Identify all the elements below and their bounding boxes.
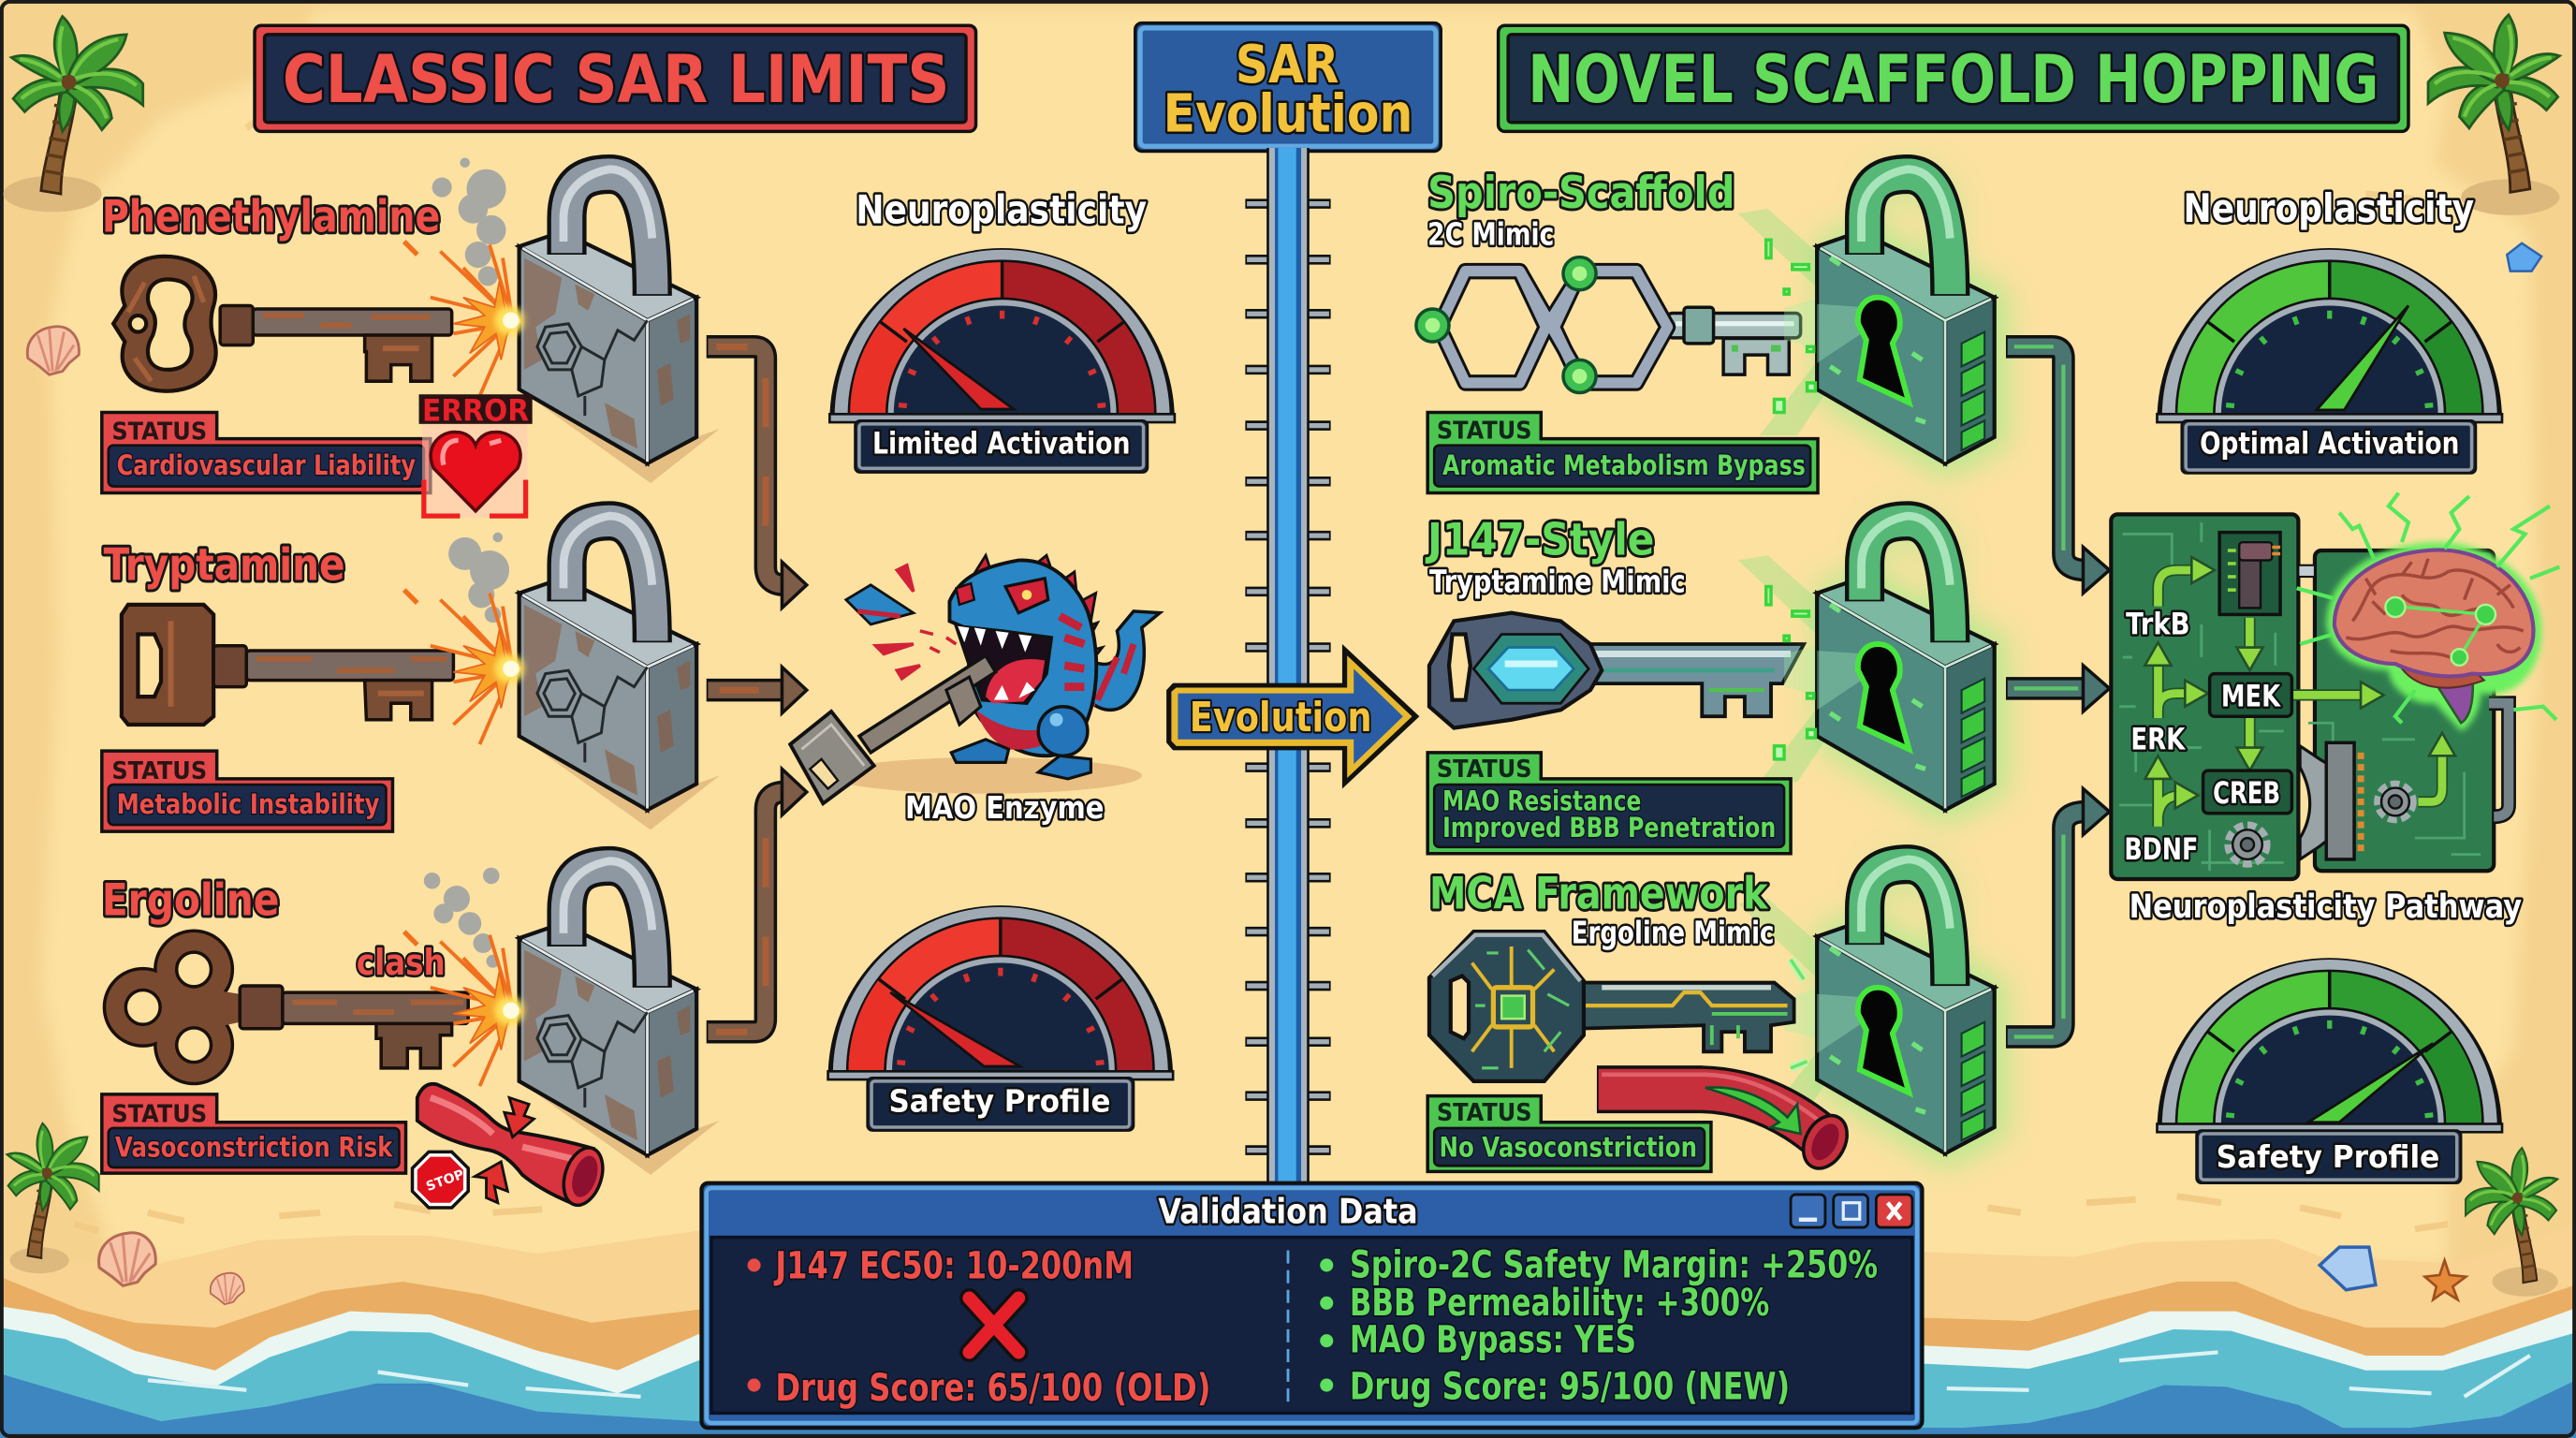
icon: grey lock, phenethylamine bbox=[520, 169, 720, 483]
panel: left circuit board bbox=[2111, 514, 2298, 879]
label: MAO enzyme: MAO Enzyme bbox=[905, 789, 1104, 826]
icon: smoke clouds bbox=[424, 157, 509, 968]
header: novel scaffold hopping: NOVEL SCAFFOLD HOPPING bbox=[1528, 41, 2378, 118]
icon: lightning bolts bbox=[2297, 493, 2559, 723]
label: Phenethylamine: Phenethylamine bbox=[102, 191, 440, 242]
arrow: ergoline to MAO bbox=[707, 769, 807, 1032]
icon: stop sign bbox=[413, 1152, 468, 1208]
icon: J147 style key bbox=[1429, 613, 1804, 728]
icon: grey lock, tryptamine bbox=[520, 516, 720, 829]
pathway node: MEK bbox=[2210, 674, 2291, 716]
label: MCA framework ergoline mimic: Ergoline Mimic bbox=[1572, 914, 1775, 950]
arrow: tryptamine to MAO bbox=[707, 668, 807, 713]
icon: glowing brain bbox=[2326, 542, 2541, 731]
panel: right circuit board bbox=[2315, 550, 2494, 871]
status: no vasoconstriction bbox=[1427, 1096, 1711, 1171]
gauge: limited activation bbox=[829, 248, 1175, 473]
label: Spiro-Scaffold 2C mimic bbox=[1427, 168, 1734, 253]
pathway node: MEK: MEK bbox=[2221, 681, 2281, 714]
pathway node: BDNF: BDNF bbox=[2124, 833, 2198, 867]
icon: open artery with green arrow bbox=[1597, 1075, 1856, 1176]
label: J147-Style tryptamine mimic bbox=[1426, 514, 1686, 600]
icon: error heart bbox=[419, 394, 533, 518]
arrow: J147 to pathway bbox=[2006, 666, 2110, 712]
old scaffold data bbox=[748, 1243, 1211, 1410]
status: vasoconstriction risk: Vasoconstriction Risk bbox=[115, 1132, 393, 1164]
label: Tryptamine: Tryptamine bbox=[104, 540, 345, 592]
title: SAR Evolution bbox=[1135, 23, 1441, 151]
pathway node: TrkB: TrkB bbox=[2126, 608, 2190, 641]
status: cardiovascular liability: Cardiovascular Liability bbox=[117, 449, 416, 481]
pipe connectors bbox=[2489, 703, 2509, 816]
gauge: safety profile, novel: Safety Profile bbox=[2217, 1138, 2439, 1175]
status: MAO resistance, BBB penetration: STATUS bbox=[1437, 755, 1532, 783]
pathway node: CREB: CREB bbox=[2213, 777, 2280, 811]
arrow: MCA to pathway bbox=[2006, 788, 2110, 1036]
header: novel scaffold hopping bbox=[1499, 25, 2408, 131]
status: cardiovascular liability: STATUS bbox=[111, 417, 207, 445]
label: J147-Style tryptamine mimic: J147-Style bbox=[1426, 514, 1654, 565]
arrow: evolution bbox=[1166, 644, 1419, 788]
icon: stop sign: STOP bbox=[424, 1167, 466, 1195]
status: no vasoconstriction: No Vasoconstriction bbox=[1439, 1132, 1697, 1164]
icon: small gears bbox=[2230, 785, 2411, 862]
gauge: optimal activation: Optimal Activation bbox=[2200, 427, 2459, 461]
icon: collision spark 3 bbox=[404, 932, 524, 1086]
window buttons bbox=[1791, 1195, 1912, 1227]
header: classic SAR limits: CLASSIC SAR LIMITS bbox=[283, 41, 949, 118]
header: classic SAR limits bbox=[255, 25, 976, 131]
title: SAR Evolution: SAR bbox=[1236, 35, 1339, 95]
status: aromatic metabolism bypass bbox=[1427, 413, 1818, 493]
label: neuroplasticity, classic: Neuroplasticity bbox=[856, 187, 1147, 233]
palm tree: bottom left bbox=[7, 1123, 99, 1273]
title: validation data: Validation Data bbox=[1158, 1192, 1418, 1232]
icon: rusty key, ergoline bbox=[115, 942, 468, 1073]
arrow: phenethylamine to MAO bbox=[707, 346, 807, 608]
pathway arrows bbox=[2159, 570, 2442, 827]
ocean and shoreline waves bbox=[0, 1225, 2576, 1438]
palm tree: bottom right bbox=[2466, 1148, 2558, 1297]
title: SAR Evolution: Evolution bbox=[1164, 83, 1412, 144]
status: no vasoconstriction: STATUS bbox=[1437, 1098, 1532, 1126]
pathway node: CREB bbox=[2203, 770, 2291, 814]
status: aromatic metabolism bypass: STATUS bbox=[1437, 417, 1532, 445]
status: metabolic instability: STATUS bbox=[111, 756, 207, 785]
icon: collision spark 2 bbox=[404, 590, 524, 744]
status: metabolic instability: Metabolic Instability bbox=[117, 788, 380, 820]
arrow: spiro scaffold to pathway bbox=[2006, 346, 2110, 594]
new scaffold data: Spiro-2C Safety Margin: +250% bbox=[1350, 1243, 1878, 1287]
new scaffold data: BBB Permeability: +300% bbox=[1350, 1281, 1769, 1325]
icon: spiro scaffold key bbox=[1416, 257, 1801, 392]
palm tree: top right bbox=[2428, 15, 2559, 215]
status: MAO resistance, BBB penetration bbox=[1427, 753, 1791, 854]
icon: green lock, MCA framework bbox=[1738, 850, 2008, 1168]
icon: grey lock, ergoline bbox=[520, 861, 720, 1175]
icon: shells and starfish bbox=[27, 243, 2541, 1304]
status: vasoconstriction risk: STATUS bbox=[111, 1100, 207, 1128]
label: MCA framework ergoline mimic bbox=[1429, 869, 1775, 950]
panel: validation data window bbox=[701, 1183, 1922, 1428]
arrow: evolution: Evolution bbox=[1190, 694, 1372, 741]
icon: error heart: ERROR bbox=[422, 394, 529, 428]
central evolution spine bbox=[1245, 148, 1331, 1186]
old scaffold data: J147 EC50: 10-200nM bbox=[773, 1243, 1134, 1287]
icon: green lock, J147 style bbox=[1738, 506, 2008, 825]
gauge: safety profile, classic: Safety Profile bbox=[889, 1082, 1110, 1119]
pathway node: ERK: ERK bbox=[2130, 723, 2187, 756]
palm tree: top left bbox=[4, 17, 143, 212]
status: cardiovascular liability bbox=[102, 413, 431, 493]
label: Spiro-Scaffold 2C mimic: Spiro-Scaffold bbox=[1427, 168, 1734, 219]
icon: collision spark 1 bbox=[404, 242, 524, 396]
icon: constricted artery bbox=[417, 1084, 609, 1211]
label: clash: clash bbox=[357, 942, 446, 984]
icon: rusty key, phenethylamine bbox=[113, 257, 452, 391]
old scaffold data: Drug Score: 65/100 (OLD) bbox=[775, 1366, 1211, 1410]
label: neuroplasticity pathway: Neuroplasticity Pathway bbox=[2130, 888, 2522, 926]
icon: red X bbox=[970, 1299, 1018, 1352]
label: Ergoline: Ergoline bbox=[102, 875, 279, 927]
gauge: safety profile, novel bbox=[2157, 958, 2502, 1183]
icon: big gear and heat sink bbox=[2300, 742, 2361, 859]
icon: MAO enzyme monster chewing key bbox=[790, 555, 1160, 803]
icon: chip lever bbox=[2219, 533, 2280, 614]
icon: rusty key, tryptamine bbox=[122, 605, 453, 725]
new scaffold data: Drug Score: 95/100 (NEW) bbox=[1350, 1364, 1790, 1408]
gauge: optimal activation bbox=[2157, 248, 2502, 473]
label: neuroplasticity, novel: Neuroplasticity bbox=[2184, 185, 2474, 231]
new scaffold data bbox=[1320, 1243, 1878, 1408]
status: MAO resistance, BBB penetration: Improved BBB Penetration bbox=[1442, 812, 1776, 844]
gauge: safety profile, classic bbox=[828, 905, 1173, 1131]
new scaffold data: MAO Bypass: YES bbox=[1350, 1317, 1636, 1361]
icon: MCA circuit key bbox=[1429, 932, 1794, 1081]
status: aromatic metabolism bypass: Aromatic Metabolism Bypass bbox=[1442, 449, 1806, 481]
label: J147-Style tryptamine mimic: Tryptamine Mimic bbox=[1429, 564, 1686, 600]
gauge: limited activation: Limited Activation bbox=[872, 427, 1131, 461]
status: MAO resistance, BBB penetration: MAO Resistance bbox=[1442, 785, 1641, 816]
status: vasoconstriction risk bbox=[102, 1094, 406, 1173]
label: Spiro-Scaffold 2C mimic: 2C Mimic bbox=[1427, 216, 1554, 253]
status: metabolic instability bbox=[102, 751, 392, 831]
label: MCA framework ergoline mimic: MCA Framework bbox=[1429, 869, 1769, 920]
chart: neuroplasticity pathway circuit bbox=[2111, 493, 2559, 879]
icon: green lock, spiro scaffold bbox=[1738, 160, 2008, 478]
